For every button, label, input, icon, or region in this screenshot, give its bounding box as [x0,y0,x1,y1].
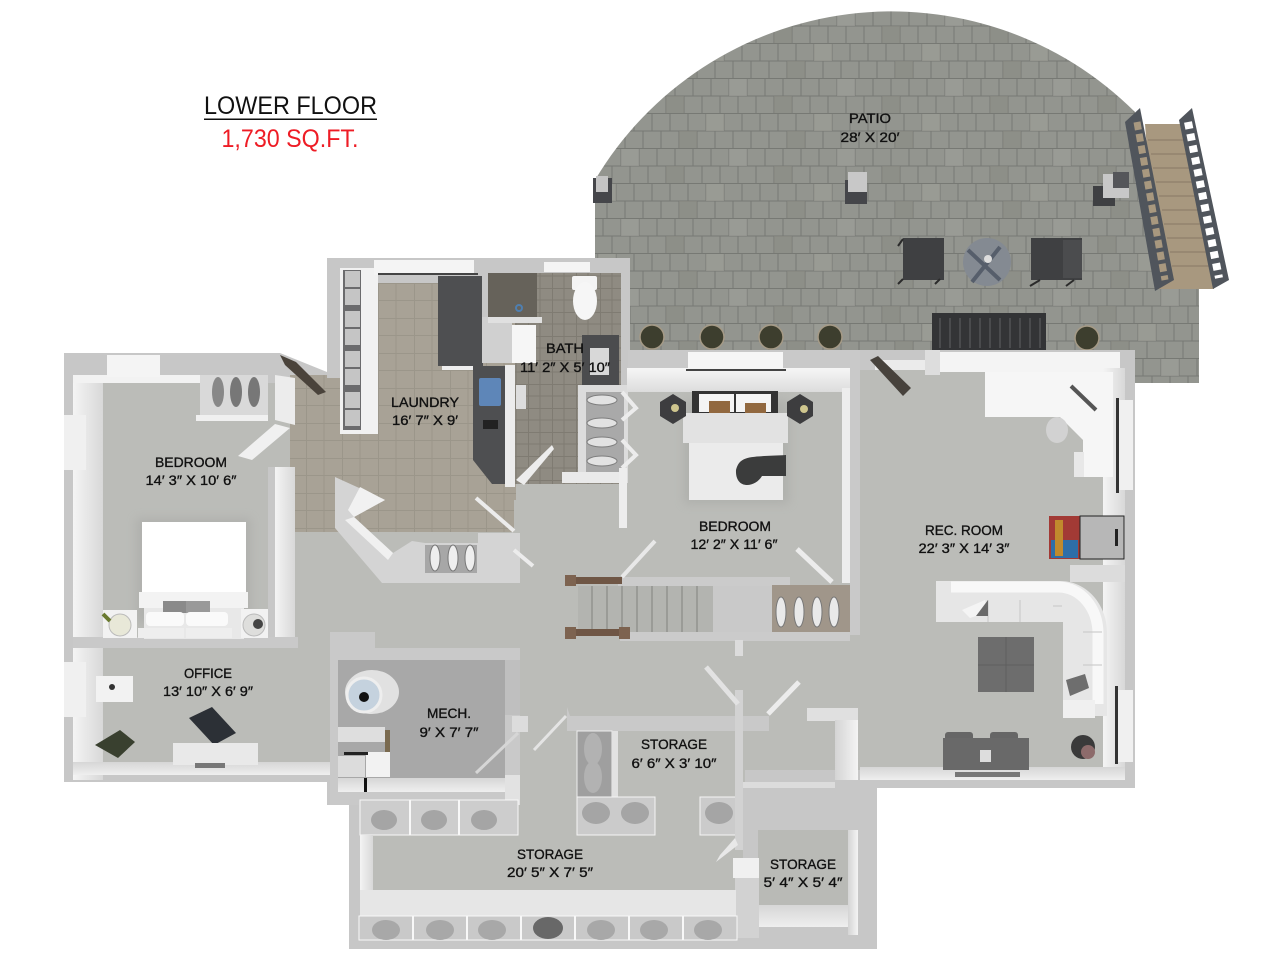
room label: storage 6x3: 6′ 6″ X 3′ 10″ [632,755,717,771]
icon: corner desk [985,372,1113,477]
room label: north bedroom [690,518,778,552]
room label: storage 5x5 [764,856,843,890]
icon: linen closet [562,385,636,528]
panel: carpet floors [103,370,1103,915]
icon: arcade and cabinet [1049,516,1124,559]
icon: exterior stairs [1125,108,1229,291]
icon: north bedroom bed [660,391,813,504]
panel: storage shelving bottom row [359,890,737,940]
panel: building footprint [64,258,1135,949]
panel: storage shelving top row [360,800,518,915]
panel: bath walls and fixtures [482,262,630,487]
room label: mechanical: 9′ X 7′ 7″ [420,724,479,740]
title: LOWER FLOOR [204,92,377,120]
icon: north bedroom closet [735,585,850,656]
room label: storage 6x3: STORAGE [641,736,707,752]
panel: patio paving [595,11,1199,383]
room label: patio: PATIO [849,110,891,126]
panel: laundry tile floor [290,283,516,532]
panel: bath and laundry outer walls [327,258,630,378]
room label: mechanical: MECH. [427,705,471,721]
room label: patio: 28′ X 20′ [840,129,900,145]
icon: media console [943,732,1095,777]
icon: laundry counters [438,276,505,484]
room label: bath: BATH [546,340,584,356]
room label: north bedroom: BEDROOM [699,518,771,534]
icon: planters [640,325,1099,350]
room label: storage 20x7: STORAGE [517,846,583,862]
icon: west closet [196,375,268,421]
room label: rec room: 22′ 3″ X 14′ 3″ [918,540,1010,556]
room label: storage 5x5: 5′ 4″ X 5′ 4″ [764,874,843,890]
panel: laundry closet wedge [335,477,533,583]
room label: west bedroom: BEDROOM [155,454,227,470]
room label: north bedroom: 12′ 2″ X 11′ 6″ [690,536,778,552]
room label: laundry [391,394,460,428]
room label: bath [520,340,610,375]
icon: sectional sofa [936,581,1107,718]
icon: ottoman [978,637,1034,692]
panel: storage walls [534,667,877,850]
icon: west bedroom bed [103,518,268,639]
room label: storage 20x7 [507,846,593,880]
icon: interior stairs [565,541,850,641]
room label: office: 13′ 10″ X 6′ 9″ [163,683,253,699]
title [204,92,377,153]
panel: rec room walls [860,350,1135,788]
room label: rec room: REC. ROOM [925,522,1003,538]
room label: storage 20x7: 20′ 5″ X 7′ 5″ [507,864,593,880]
panel: laundry cabinets [340,260,478,434]
room label: bath: 11′ 2″ X 5′ 10″ [520,359,610,375]
icon: patio chairs and table [898,238,1082,286]
room label: storage 5x5: STORAGE [770,856,836,872]
room label: office [163,665,253,699]
room label: west bedroom: 14′ 3″ X 10′ 6″ [146,472,237,488]
panel: north bedroom walls [627,350,925,635]
panel: mechanical room [330,632,528,805]
icon: patio bench [932,313,1046,350]
room label: rec room [918,522,1010,556]
room label: office: OFFICE [184,665,232,681]
room label: laundry: LAUNDRY [391,394,460,410]
icon: patio pillars [593,172,1129,206]
room label: patio [840,110,900,145]
room label: storage 6x3 [632,736,717,771]
room label: west bedroom [146,454,237,488]
icon: office furniture [95,676,258,768]
room label: mechanical [420,705,479,740]
panel: corner storage room [716,830,858,938]
title: 1,730 SQ.FT. [222,125,358,153]
panel: bath stone floor [515,272,621,484]
room label: laundry: 16′ 7″ X 9′ [392,412,458,428]
panel: west bedroom walls [64,355,333,780]
